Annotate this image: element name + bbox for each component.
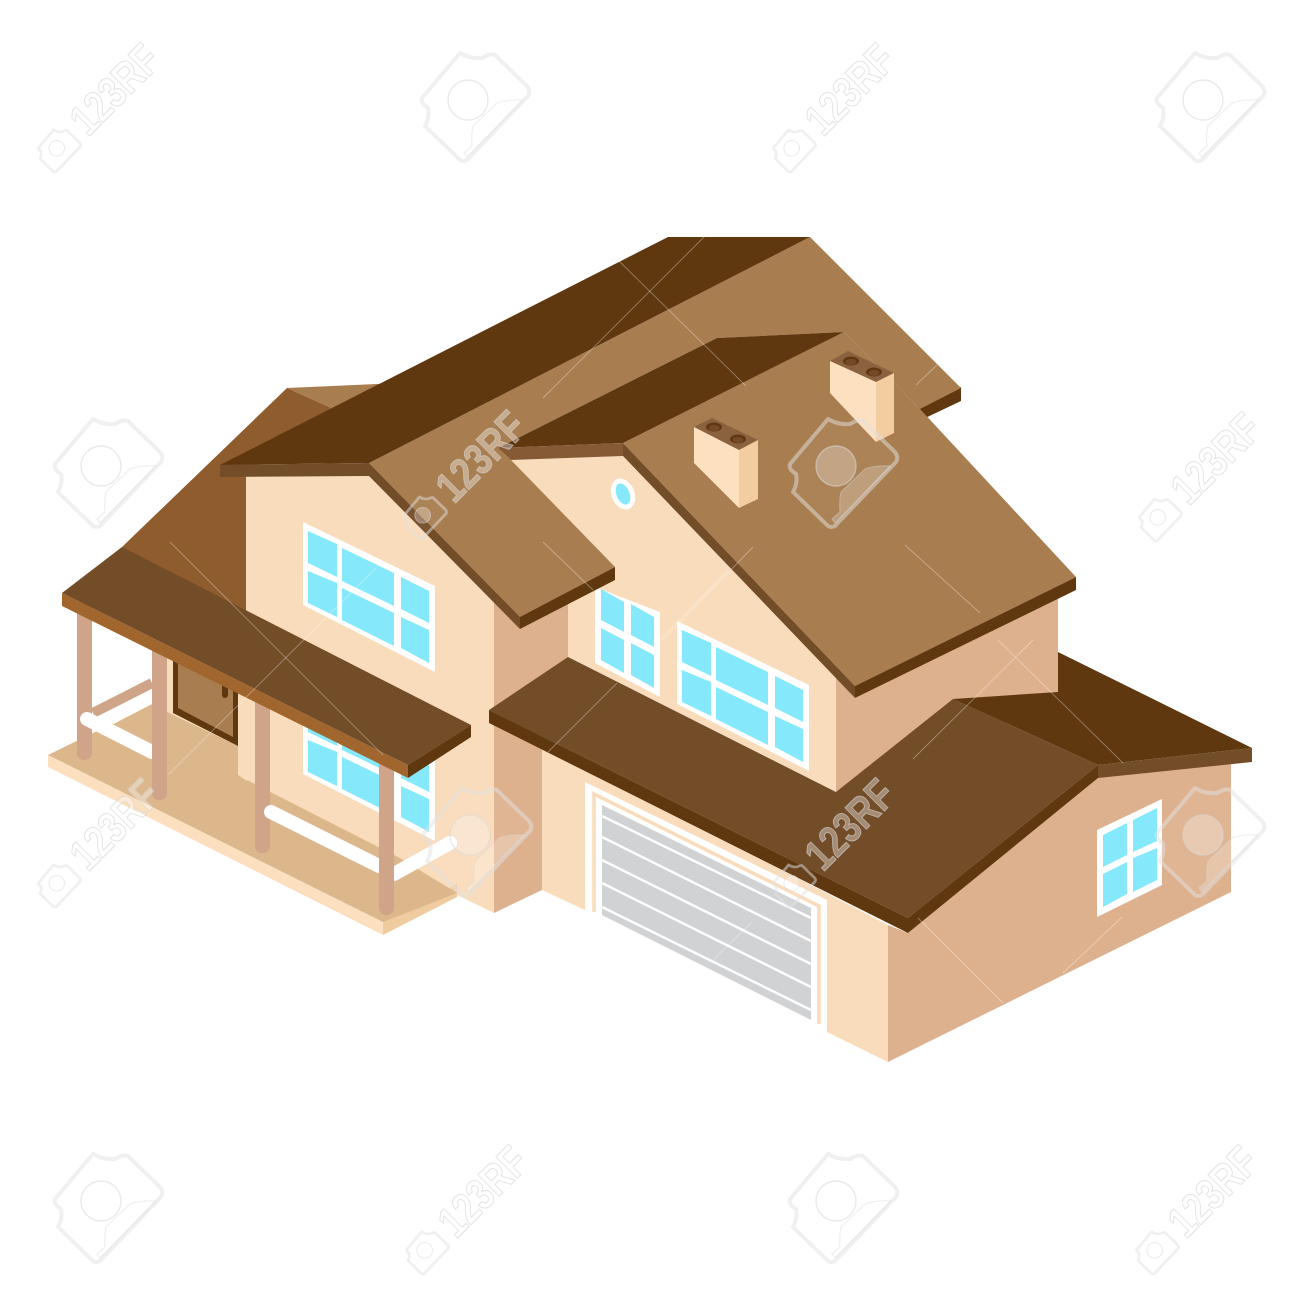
railing: side xyxy=(394,843,450,874)
mark 1 xyxy=(39,35,170,172)
central roof right edge xyxy=(855,577,1076,698)
egg 2 xyxy=(1157,53,1264,161)
garage door xyxy=(594,794,819,1024)
railing: left xyxy=(87,719,152,752)
left hip roof xyxy=(122,384,400,616)
garage main roof xyxy=(489,657,1098,933)
wall: garage front xyxy=(542,745,888,1062)
mark 5: 123RF xyxy=(60,770,170,880)
egg 7 xyxy=(55,1154,162,1262)
mark 7 xyxy=(407,1137,538,1274)
wall: main front gable xyxy=(246,476,494,913)
window: garage side xyxy=(1097,799,1162,917)
mark 4 xyxy=(1140,404,1271,541)
egg 4 xyxy=(790,419,897,527)
window: lower left under porch xyxy=(303,691,435,841)
mark 4: 123RF xyxy=(1161,404,1271,514)
garage rear roof xyxy=(953,652,1252,778)
central roof dark plane xyxy=(498,332,844,448)
mark 6 xyxy=(774,770,905,907)
front gable left edge xyxy=(369,463,520,629)
watermark hairlines xyxy=(168,236,1123,1003)
back roof fascia xyxy=(918,387,961,420)
egg 3 xyxy=(55,419,162,527)
front gable fascia xyxy=(220,463,369,477)
egg 5 xyxy=(424,788,531,896)
chimney: front xyxy=(694,418,758,508)
central roof tan plane xyxy=(623,332,1076,686)
post: front corner xyxy=(379,760,394,915)
posts: back xyxy=(77,600,270,853)
main roof dark plane xyxy=(220,237,810,465)
mark 3 xyxy=(405,402,536,539)
wall: central gable side xyxy=(836,598,1058,800)
window: central small xyxy=(595,587,660,697)
window: central large xyxy=(677,621,809,771)
wall: garage side xyxy=(888,760,1231,1062)
porch xyxy=(48,600,457,935)
mark 3: 123RF xyxy=(426,402,536,512)
post: left middle overlay xyxy=(152,700,167,800)
railing: front xyxy=(271,812,379,866)
wall: shaded connector between wings xyxy=(494,555,568,913)
window: upper left large xyxy=(303,522,435,672)
mark 8: 123RF xyxy=(1158,1137,1268,1247)
egg 8 xyxy=(790,1154,897,1262)
main roof tan plane xyxy=(369,237,961,617)
mark 5 xyxy=(39,770,170,907)
chimney: rear xyxy=(830,351,894,442)
front door xyxy=(173,655,238,746)
porch roof xyxy=(62,547,471,778)
central gable fascia xyxy=(498,443,623,460)
back railing xyxy=(93,683,152,722)
egg 1 xyxy=(422,53,529,161)
main roof xyxy=(220,237,961,629)
central roof xyxy=(498,332,1076,698)
mark 2: 123RF xyxy=(795,35,905,145)
window: oval attic xyxy=(606,475,640,513)
mark 6: 123RF xyxy=(795,770,905,880)
mark 8 xyxy=(1137,1137,1268,1274)
wall: central gable front xyxy=(511,456,836,792)
house xyxy=(48,237,1252,1062)
front gable right edge xyxy=(520,567,615,629)
porch deck xyxy=(48,704,457,935)
central roof left edge xyxy=(623,443,855,698)
egg 6 xyxy=(1157,788,1264,896)
wall behind door xyxy=(167,650,247,781)
mark 1: 123RF xyxy=(60,35,170,145)
mark 7: 123RF xyxy=(428,1137,538,1247)
mark 2 xyxy=(774,35,905,172)
